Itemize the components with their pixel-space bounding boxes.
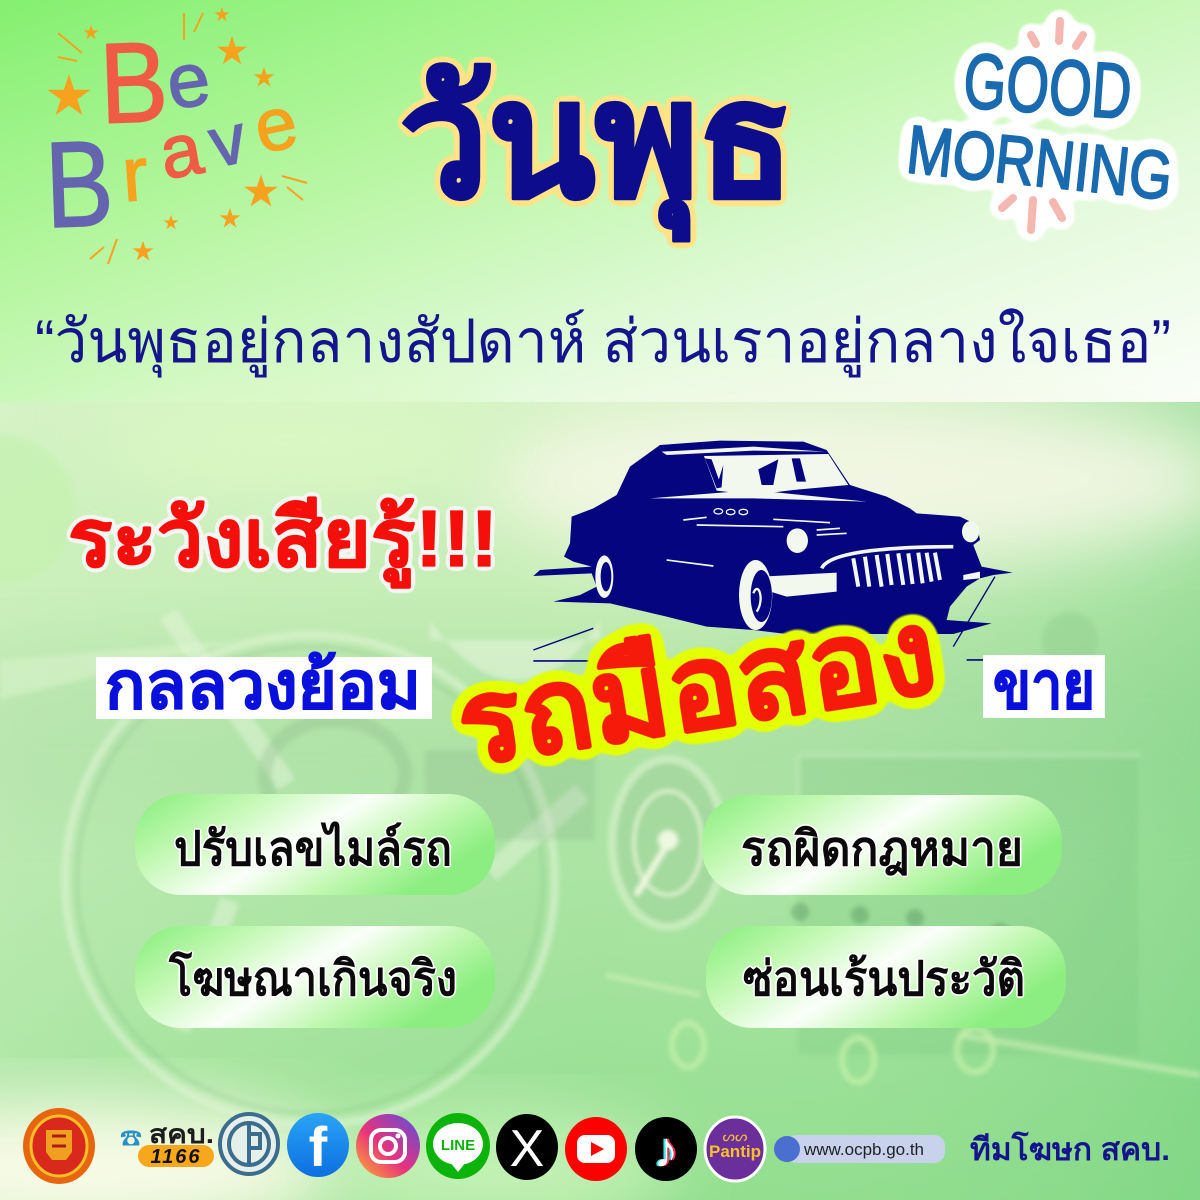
- footer: logo row: [23, 1108, 1170, 1184]
- icon: Facebook: f: [309, 1115, 328, 1178]
- icon: LINE: LINE: [441, 1137, 475, 1154]
- icon: Pantip: Pantip: [709, 1142, 761, 1161]
- icon: orange stars: ★: [214, 7, 230, 24]
- icon: hotline 1166: ☎: [120, 1126, 142, 1151]
- icon: orange stars: ★: [163, 215, 179, 232]
- label: tricks: กลลวงย้อม: [105, 648, 421, 722]
- icon: hotline 1166: 1166: [150, 1146, 202, 1168]
- icon: X: X: [510, 1120, 544, 1178]
- grille: [822, 547, 953, 568]
- pill: mileage tampering: ปรับเลขไมล์รถ: [174, 820, 452, 876]
- wheels: [739, 560, 772, 630]
- icon: Pantip: ᔕᔕ: [723, 1128, 747, 1144]
- highlighted phrase: used car: รถมือสอง: [448, 586, 945, 791]
- pill: illegal car: [702, 795, 1062, 895]
- car body: [533, 441, 1013, 634]
- icon: hotline 1166: สคบ.: [149, 1119, 214, 1149]
- title: Be Brave lettering: [43, 7, 307, 264]
- icon: orange stars: ★: [219, 206, 241, 231]
- pill: illegal car: รถผิดกฎหมาย: [741, 823, 1023, 876]
- title: Be Brave lettering: e: [247, 79, 304, 169]
- icon: Facebook: [287, 1113, 349, 1178]
- icon: TikTok: ♪: [654, 1122, 678, 1178]
- pill: hidden history: ซ่อนเร้นประวัติ: [743, 953, 1025, 1006]
- title: Be Brave lettering: B: [43, 115, 115, 253]
- title: Wednesday: วันพุธ: [400, 50, 794, 242]
- icon: LINE: [426, 1113, 490, 1179]
- icon: orange stars: ★: [253, 65, 275, 90]
- title: Good Morning lettering: [903, 21, 1176, 230]
- icon: orange stars: ★: [46, 70, 92, 122]
- title: Be Brave lettering: e: [161, 36, 215, 126]
- icon: Pantip: [705, 1117, 765, 1181]
- website badge: [774, 1135, 945, 1163]
- icon: TikTok: ♪: [652, 1122, 676, 1178]
- title: Be Brave lettering: B: [98, 19, 170, 148]
- background: faded car interior photo: [0, 380, 1200, 1200]
- icon: X: [496, 1114, 558, 1180]
- pill: false advertising: [135, 926, 495, 1028]
- headlights: [787, 528, 808, 553]
- illustration: classic car: [533, 441, 1013, 661]
- quote: “วันพุธอยู่กลางสัปดาห์ ส่วนเราอยู่กลางใจเธอ”: [35, 308, 1171, 378]
- icon: orange stars: ★: [216, 33, 248, 69]
- icon: OCPB logo: [220, 1114, 278, 1174]
- pill: mileage tampering: [135, 794, 495, 895]
- windows: [704, 454, 848, 495]
- icon: orange stars: [46, 7, 279, 264]
- icon: orange stars: ★: [83, 25, 99, 42]
- icon: agency seal: [23, 1108, 95, 1184]
- title: Be Brave lettering: a: [153, 106, 209, 195]
- pill: hidden history: [706, 926, 1066, 1028]
- icon: TikTok: [635, 1117, 697, 1181]
- icon: pink sparkle dashes: [1002, 21, 1083, 230]
- icon: YouTube: [565, 1117, 627, 1181]
- website badge: www.ocpb.go.th: [803, 1140, 924, 1159]
- label: sell: ขาย: [993, 648, 1095, 722]
- icon: orange stars: ★: [243, 171, 279, 212]
- heading: warning: ระวังเสียรู้!!!: [68, 494, 498, 589]
- title: Good Morning lettering: GOOD: [961, 36, 1135, 136]
- chrome trim: [667, 517, 847, 566]
- pill: false advertising: โฆษณาเกินจริง: [168, 950, 457, 1006]
- icon: orange stars: ★: [132, 239, 154, 264]
- icon: TikTok: ♪: [656, 1122, 680, 1178]
- icon: Instagram: [356, 1114, 420, 1178]
- title: Be Brave lettering: r: [119, 132, 151, 218]
- team credit: ทีมโฆษก สคบ.: [970, 1131, 1170, 1167]
- icon: hotline 1166: [120, 1119, 214, 1168]
- title: Be Brave lettering: v: [202, 99, 253, 182]
- background: top green gradient: [0, 0, 1200, 402]
